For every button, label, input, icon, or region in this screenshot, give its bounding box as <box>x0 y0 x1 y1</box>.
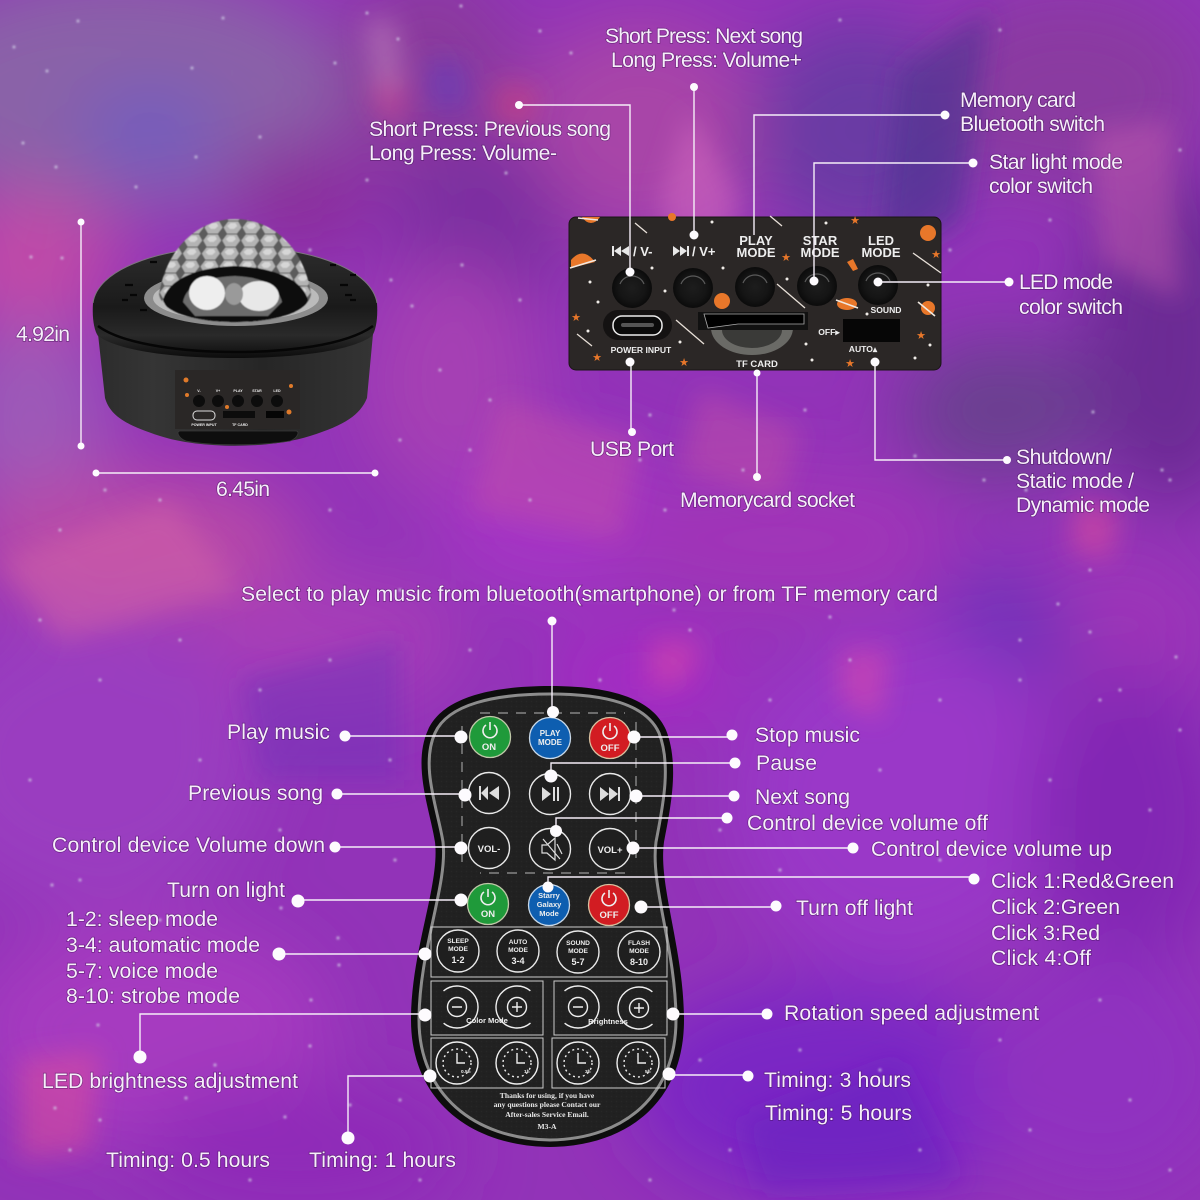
remote mode buttons: 1-2 <box>451 955 465 965</box>
button labels: / V+ <box>692 244 716 259</box>
TF card slot <box>698 312 808 355</box>
remote row 2: previous, play pause, next <box>468 772 630 814</box>
decorations: planets and stars: ★ <box>592 352 602 364</box>
callout: rotation speed <box>666 1002 1039 1025</box>
remote color mode and brightness adjusters <box>427 977 669 1038</box>
remote mode buttons: MODE <box>448 946 468 953</box>
callout: next song: Long Press: Volume+ <box>611 49 802 72</box>
callout: volume off: Control device volume off <box>747 812 988 835</box>
remote thank-you note: Thanks for using, if you have <box>500 1091 595 1100</box>
remote mode buttons: SOUND <box>566 940 590 947</box>
product device <box>93 219 377 446</box>
callout: music source selection <box>241 583 938 718</box>
callout: volume up: Control device volume up <box>871 838 1112 861</box>
remote row 4: light on, starry galaxy mode, off: Mode <box>539 909 559 918</box>
remote color mode and brightness adjusters: Color Mode <box>466 1016 508 1025</box>
slide switch <box>843 319 900 342</box>
callout: next song <box>630 786 850 809</box>
callout: play music: Play music <box>227 721 330 744</box>
button labels: / V- <box>633 244 653 259</box>
callout: volume down: Control device Volume down <box>52 834 325 857</box>
dimension: width <box>92 470 378 501</box>
callout: stop music <box>628 724 860 747</box>
callout: turn off light <box>634 897 913 920</box>
mini control panel: V- <box>197 389 201 393</box>
panel small labels: SOUND <box>870 305 902 315</box>
callout: timing 0.5 and 1 hours: Timing: 0.5 hours <box>106 1149 270 1172</box>
callout: LED mode: color switch <box>1019 296 1123 319</box>
panel small labels: AUTO▴ <box>849 344 878 354</box>
callout: LED brightness <box>42 1008 432 1093</box>
decorations: planets and stars: ★ <box>781 252 791 264</box>
panel: device control panel <box>569 213 941 370</box>
button labels: MODE <box>862 245 901 260</box>
remote row 3: volume down, mute, volume up <box>468 828 630 870</box>
panel small labels: TF CARD <box>736 359 778 370</box>
callout: click colour cycle: Click 4:Off <box>991 947 1091 970</box>
callout: sleep and other modes: 1-2: sleep mode <box>66 908 218 931</box>
callout: click colour cycle <box>542 870 1174 970</box>
callout: sleep and other modes <box>66 908 432 1008</box>
callout: timing 3 and 5 hours: Timing: 3 hours <box>764 1069 911 1092</box>
remote row 4: light on, starry galaxy mode, off: Starry <box>538 891 561 900</box>
decorations: planets and stars: ★ <box>931 249 941 261</box>
remote mode buttons: MODE <box>568 948 588 955</box>
callout: turn off light: Turn off light <box>796 897 913 920</box>
remote timer buttons: 1h <box>524 1069 530 1075</box>
callout: memory card socket: Memorycard socket <box>680 489 855 512</box>
callout: previous song: Previous song <box>188 782 323 805</box>
mini control panel: V+ <box>216 389 220 393</box>
button labels: LED <box>868 233 894 248</box>
remote timer buttons: 5h <box>645 1069 651 1075</box>
button labels: MODE <box>736 245 776 260</box>
callout: click colour cycle: Click 1:Red&Green <box>991 870 1174 893</box>
decorations: planets and stars <box>570 213 941 370</box>
remote timer buttons <box>431 1038 665 1088</box>
panel small labels: OFF▸ <box>818 327 840 337</box>
remote row 1: music on, play mode, off: OFF <box>600 743 620 754</box>
callout: timing 0.5 and 1 hours <box>106 1070 456 1172</box>
callout: timing 3 and 5 hours <box>662 1068 912 1125</box>
remote thank-you note: M3-A <box>538 1122 557 1131</box>
decorations: planets and stars: ★ <box>571 312 581 324</box>
remote row 1: music on, play mode, off: MODE <box>538 738 563 747</box>
callout: previous song: Short Press: Previous song <box>369 118 611 141</box>
mini control panel: STAR <box>252 389 262 393</box>
callout: memory card bluetooth switch: Bluetooth switch <box>960 113 1105 136</box>
callout: USB port <box>590 358 674 461</box>
callout: LED mode <box>874 271 1123 319</box>
callout: previous song <box>188 782 472 805</box>
callout: volume down <box>52 834 468 857</box>
callout: stop music: Stop music <box>755 724 860 747</box>
callout: USB port: USB Port <box>590 438 674 461</box>
callout: memory card bluetooth switch <box>754 89 1105 235</box>
callout: timing 3 and 5 hours: Timing: 5 hours <box>765 1102 912 1125</box>
button labels: STAR <box>803 233 838 248</box>
remote timer buttons: 0.5h <box>461 1069 471 1075</box>
callout: LED mode: LED mode <box>1019 271 1113 294</box>
callout: LED brightness: LED brightness adjustment <box>42 1070 298 1093</box>
remote mode buttons: 5-7 <box>571 957 585 967</box>
remote timer buttons: 3h <box>585 1069 591 1075</box>
dimension: width: 6.45in <box>216 478 270 501</box>
remote thank-you note <box>494 1091 601 1131</box>
dimension: height: 4.92in <box>16 323 70 346</box>
mini control panel: TF CARD <box>232 423 248 427</box>
callout: volume off <box>550 812 988 837</box>
callout: star light mode: Star light mode <box>989 151 1123 174</box>
callout: star light mode <box>810 151 1123 286</box>
callout: next song: Next song <box>755 786 850 809</box>
remote row 3: volume down, mute, volume up: VOL- <box>478 844 500 855</box>
remote row 4: light on, starry galaxy mode, off: OFF <box>600 910 619 921</box>
callout: sleep and other modes: 3-4: automatic mode <box>66 934 260 957</box>
button labels <box>612 233 901 260</box>
remote control <box>411 686 684 1147</box>
callout: volume up <box>626 838 1112 861</box>
callout: click colour cycle: Click 3:Red <box>991 922 1100 945</box>
callout: mode switch: Static mode / <box>1016 470 1134 493</box>
remote mode buttons <box>431 927 667 977</box>
light dome <box>144 219 328 326</box>
decorations: planets and stars: ★ <box>845 358 855 370</box>
decorations: planets and stars: ★ <box>679 357 689 369</box>
callout: mode switch: Shutdown/ <box>1016 446 1112 469</box>
callout: mode switch: Dynamic mode <box>1016 494 1150 517</box>
callout: play music <box>227 721 468 744</box>
remote mode buttons: MODE <box>629 948 649 955</box>
callout: pause <box>544 752 817 782</box>
callout: mode switch <box>870 358 1150 517</box>
remote color mode and brightness adjusters: Brightness <box>588 1017 628 1026</box>
callout: turn on light <box>167 879 468 908</box>
callout: music source selection: Select to play music from bluetooth(smartphone) or from TF memory card <box>241 583 938 606</box>
callout: rotation speed: Rotation speed adjustment <box>784 1002 1039 1025</box>
callout: star light mode: color switch <box>989 175 1093 198</box>
mini control panel: PLAY <box>233 389 243 393</box>
callout: sleep and other modes: 8-10: strobe mode <box>66 985 240 1008</box>
callout: next song <box>605 25 803 240</box>
callout: click colour cycle: Click 2:Green <box>991 896 1120 919</box>
callout: pause: Pause <box>756 752 817 775</box>
remote mode buttons: MODE <box>508 947 528 954</box>
remote mode buttons: FLASH <box>628 940 650 947</box>
device top housing <box>93 246 377 358</box>
buttons <box>612 265 898 308</box>
remote thank-you note: any questions please Contact our <box>494 1100 601 1109</box>
USB-C port <box>603 310 672 340</box>
callout: previous song: Long Press: Volume- <box>369 142 557 165</box>
panel small labels: POWER INPUT <box>611 345 672 355</box>
callout: sleep and other modes: 5-7: voice mode <box>66 960 218 983</box>
decorations: planets and stars: ★ <box>916 330 926 342</box>
remote row 4: light on, starry galaxy mode, off: Galaxy <box>537 900 562 909</box>
remote mode buttons: 8-10 <box>630 957 648 967</box>
remote mode buttons: AUTO <box>509 939 527 946</box>
remote row 1: music on, play mode, off: ON <box>482 742 496 753</box>
dimension: height <box>16 218 84 450</box>
remote row 1: music on, play mode, off: PLAY <box>540 729 561 738</box>
remote mode buttons: 3-4 <box>511 956 525 966</box>
remote mode buttons: SLEEP <box>447 938 469 945</box>
remote row 1: music on, play mode, off <box>470 716 630 758</box>
mini control panel: LED <box>273 389 281 393</box>
callout: memory card socket <box>680 370 855 512</box>
remote row 4: light on, starry galaxy mode, off: ON <box>481 909 495 920</box>
callout: timing 0.5 and 1 hours: Timing: 1 hours <box>309 1149 456 1172</box>
callout: memory card bluetooth switch: Memory card <box>960 89 1076 112</box>
mini control panel: POWER INPUT <box>191 423 217 427</box>
remote thank-you note: After-sales Service Email. <box>505 1110 589 1119</box>
remote row 4: light on, starry galaxy mode, off <box>468 884 630 926</box>
callout: previous song <box>369 101 634 276</box>
button labels: MODE <box>800 245 840 260</box>
panel small labels <box>611 305 902 370</box>
remote row 3: volume down, mute, volume up: VOL+ <box>597 845 623 856</box>
callout: next song: Short Press: Next song <box>605 25 803 48</box>
decorations: planets and stars: ★ <box>850 215 860 227</box>
callout: turn on light: Turn on light <box>167 879 285 902</box>
mini control panel <box>175 370 300 429</box>
button labels: PLAY <box>739 233 773 248</box>
